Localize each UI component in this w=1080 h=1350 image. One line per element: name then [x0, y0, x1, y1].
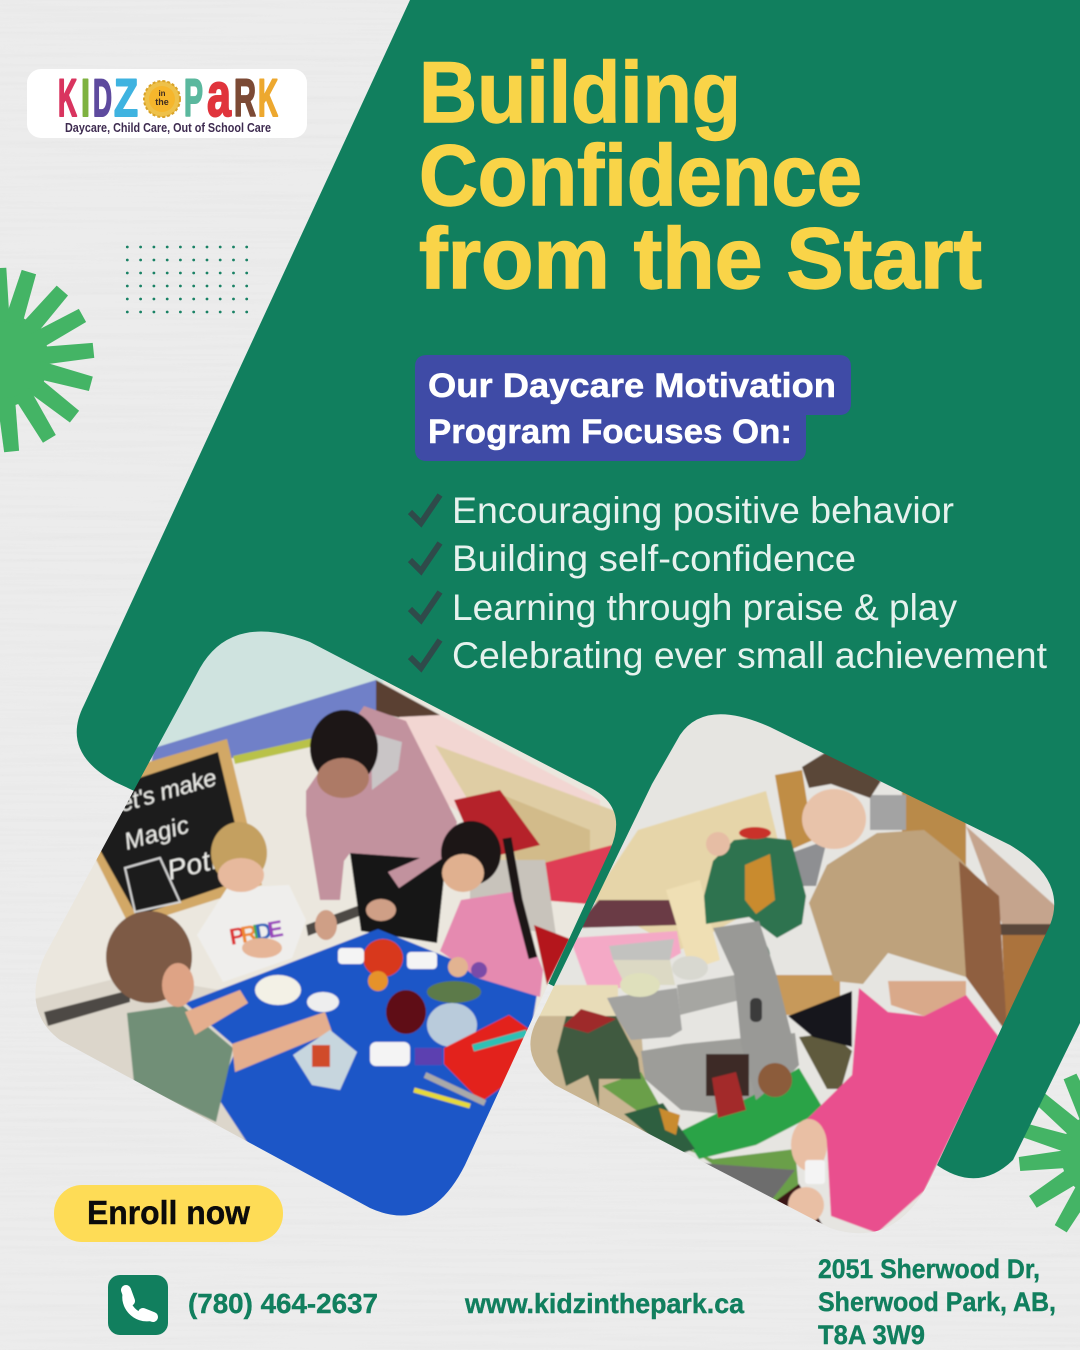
logo wordmark: Kidz: [58, 69, 138, 128]
icon: phone: [108, 1275, 168, 1335]
chalkboard: Poti: [164, 843, 221, 886]
button: enroll now: [54, 1185, 283, 1242]
logo wordmark: Kidz: D: [93, 69, 112, 128]
chalkboard: [96, 738, 262, 919]
logo wordmark: Park: K: [258, 69, 278, 128]
dot grid: [126, 246, 248, 313]
check item 3: Learning through praise & play: [452, 587, 957, 628]
logo sun: in: [158, 89, 166, 98]
title: [419, 45, 982, 307]
check item 1: Encouraging positive behavior: [452, 490, 954, 531]
checklist: [410, 490, 1048, 676]
girl with braids: [440, 821, 543, 997]
chalkboard: et's make: [116, 764, 220, 818]
logo tagline: Daycare, Child Care, Out of School Care: [65, 120, 271, 135]
logo wordmark: Park: [184, 61, 278, 130]
address: [818, 1254, 1056, 1350]
boy in green shirt: [106, 911, 332, 1122]
boy in white shirt: PRIDE: [227, 915, 285, 950]
title: from the Start: [419, 211, 982, 307]
icon: left green starburst: [0, 268, 94, 452]
photo: children at a blue activity table with teacher: [36, 632, 616, 1216]
table items: [255, 939, 533, 1106]
logo sun: the: [155, 97, 169, 107]
logo wordmark: Park: P: [184, 69, 203, 128]
logo card: [27, 61, 307, 138]
phone number: (780) 464-2637: [188, 1288, 378, 1319]
address: T8A 3W9: [818, 1320, 925, 1350]
check item 4: Celebrating ever small achievement: [452, 635, 1048, 676]
subheading tag: [415, 355, 851, 461]
subheading tag: Program Focuses On:: [428, 413, 792, 451]
boy with turtle figure: [704, 749, 881, 972]
logo sun: [144, 81, 180, 117]
logo wordmark: Kidz: K: [58, 69, 77, 128]
address: 2051 Sherwood Dr,: [818, 1254, 1040, 1284]
blue table: [186, 928, 538, 1216]
girl with pink shirt: [770, 830, 1007, 1233]
title: Confidence: [419, 128, 862, 224]
button: enroll now: Enroll now: [87, 1194, 250, 1231]
photo: children playing with toy castle: [530, 714, 1054, 1233]
logo wordmark: Kidz: Z: [114, 69, 138, 128]
website: www.kidzinthepark.ca: [464, 1288, 744, 1319]
chalkboard: Magic: [121, 812, 192, 856]
icon: right green starburst: [1019, 1073, 1080, 1233]
toy turtles: [557, 1009, 852, 1156]
title: Building: [419, 45, 741, 141]
mat and road: [602, 1072, 799, 1205]
check item 2: Building self-confidence: [452, 538, 856, 579]
address: Sherwood Park, AB,: [818, 1287, 1056, 1317]
logo wordmark: Kidz: I: [81, 69, 90, 128]
teacher: [306, 706, 457, 943]
boy in white shirt: [197, 822, 306, 982]
logo wordmark: Park: R: [234, 69, 256, 128]
subheading tag: Our Daycare Motivation: [428, 367, 836, 405]
toy castle: [607, 921, 824, 1159]
logo wordmark: Park: a: [207, 61, 231, 130]
